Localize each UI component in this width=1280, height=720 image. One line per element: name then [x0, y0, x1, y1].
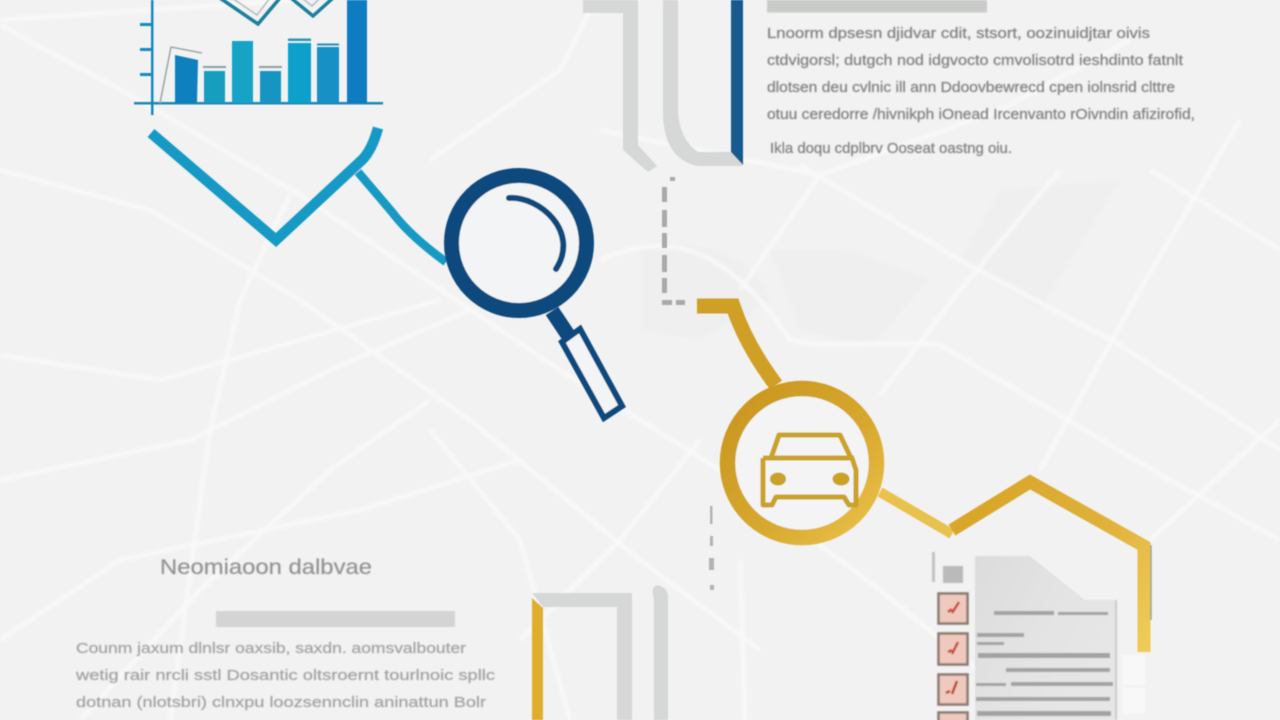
- dashed connector top: [662, 177, 685, 305]
- top right text block: Lnoorm dpsesn djidvar cdit, stsort, oozinuidjtar oivis: [767, 26, 1150, 42]
- icon: car in gold circle: [728, 388, 876, 538]
- checkbox 1: [938, 594, 968, 624]
- section heading: Neomiaoon dalbvae: [160, 555, 372, 579]
- document with checklist: [932, 552, 1145, 720]
- top centre grey frame: [583, 0, 743, 172]
- checkbox 3: [938, 674, 968, 704]
- document sheet: [975, 556, 1115, 720]
- gold frame edge: [532, 598, 543, 720]
- header bar: [216, 611, 455, 627]
- checkbox 2: [938, 634, 968, 664]
- bar chart: [134, 0, 383, 115]
- gold connector line top: [697, 306, 776, 385]
- bottom left text block: Counm jaxum dlnlsr oaxsib, saxdn. aomsvalbouter: [76, 641, 466, 657]
- bottom left text block: wetig rair nrcli sstl Dosantic oltsroernt tourlnoic spllc: [75, 668, 495, 684]
- top right text block: Ikla doqu cdplbrv Ooseat oastng oiu.: [770, 141, 1012, 157]
- car: [763, 435, 856, 505]
- dotted connector bottom: [709, 506, 714, 590]
- icon: magnifying glass: [452, 176, 622, 418]
- top right text block: [767, 0, 1195, 157]
- top right text block: dlotsen deu cvlnic ill ann Ddoovbewrecd cpen iolnsrid clttre: [767, 80, 1175, 96]
- blue frame edge: [731, 0, 743, 165]
- chart diamond marks: [220, 0, 333, 24]
- gold connector line right: [880, 482, 1151, 652]
- checkbox 4: [938, 712, 968, 720]
- chart trend line: [160, 47, 202, 103]
- chart axes: [134, 0, 383, 115]
- document marks: [932, 552, 1117, 720]
- bottom centre frame: [532, 585, 668, 720]
- top right text block: otuu ceredorre /hivnikph iOnead Ircenvanto rOivndin afizirofid,: [767, 107, 1195, 123]
- header bar: [767, 0, 987, 12]
- chart bars: [175, 0, 367, 103]
- side white tabs: [1122, 655, 1145, 714]
- bottom left text block: [75, 555, 495, 711]
- top right text block: ctdvigorsl; dutgch nod idgvocto cmvolisotrd ieshdinto fatnlt: [767, 53, 1183, 69]
- bottom left text block: dotnan (nlotsbri) clnxpu loozsennclin aninattun Bolr: [76, 695, 486, 711]
- blue connector arrow line: [151, 128, 446, 262]
